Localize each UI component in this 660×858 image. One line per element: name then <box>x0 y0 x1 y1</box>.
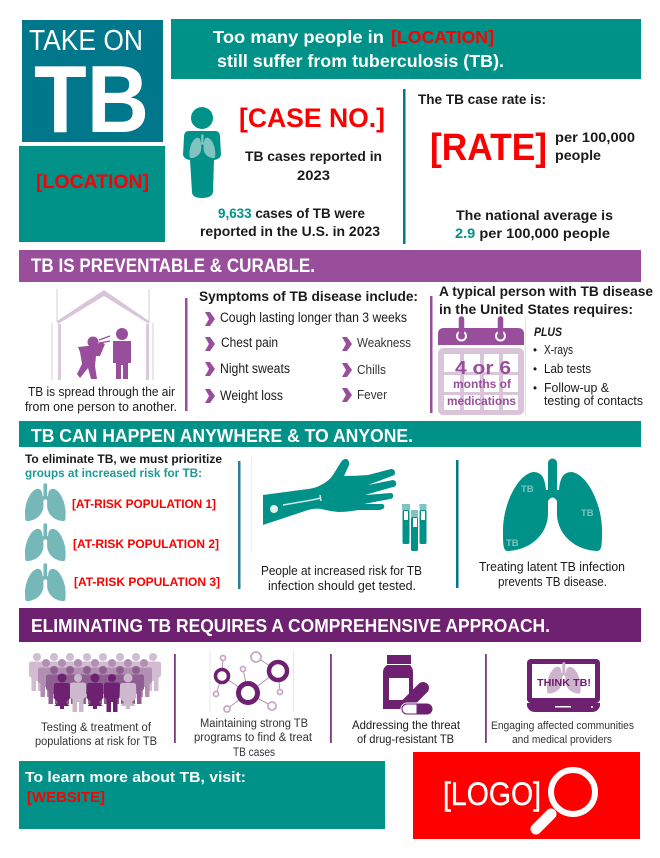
symptoms list <box>199 288 418 403</box>
stat: case rate: people <box>555 148 602 163</box>
stat: case rate: per 100,000 <box>555 130 635 145</box>
text: spread through air: from one person to another. <box>25 400 177 414</box>
national average text <box>455 208 613 241</box>
heading: preventable and curable <box>19 250 641 282</box>
symptoms list: Symptoms of TB disease include: <box>199 288 418 304</box>
text: get tested: People at increased risk for TB <box>261 564 422 578</box>
location box: [LOCATION] <box>36 172 149 193</box>
footer: logo box with magnifier: [LOGO] <box>443 776 541 812</box>
national cases text <box>200 206 381 239</box>
text: strong TB programs: Maintaining strong TB <box>200 718 308 730</box>
stat: case rate: [RATE] <box>430 127 547 169</box>
text: strong TB programs <box>194 718 313 759</box>
text: get tested: infection should get tested. <box>268 579 416 593</box>
symptoms list: Chills <box>357 362 386 377</box>
national cases text: reported in the U.S. in 2023 <box>200 224 381 239</box>
text: drug resistant <box>352 718 461 746</box>
icon: lungs with TB: TB <box>521 484 534 495</box>
heading: anywhere and anyone: TB CAN HAPPEN ANYWHERE & TO ANYONE. <box>31 426 413 446</box>
plus list: Lab tests <box>544 362 591 376</box>
icon: calendar: 4 or 6 <box>455 358 511 378</box>
symptoms list: Weight loss <box>220 388 283 403</box>
top banner <box>171 19 641 79</box>
national cases text: 9,633 cases of TB were <box>218 206 365 221</box>
footer: website box: [WEBSITE] <box>27 789 105 806</box>
plus list: PLUS <box>534 325 562 339</box>
text: latent TB: Treating latent TB infection <box>479 560 625 574</box>
icon: calendar: medications <box>447 396 516 408</box>
text: prioritize groups <box>25 452 222 480</box>
stat: case number: TB cases reported in <box>245 149 382 164</box>
icon: person with lungs <box>183 107 221 198</box>
text: prioritize groups: groups at increased risk for TB: <box>25 466 202 480</box>
stat: case rate <box>418 92 635 169</box>
text: testing and treatment: Testing & treatment of <box>41 722 152 734</box>
text: engaging communities: Engaging affected communities <box>491 720 634 732</box>
icon: laptop Think TB: THINK TB! <box>537 677 591 689</box>
text: latent TB <box>479 560 625 589</box>
icon: lungs with TB <box>503 459 602 551</box>
text: testing and treatment <box>35 722 157 748</box>
icon: connected program rings <box>210 650 294 712</box>
text: engaging communities: and medical providers <box>512 734 612 746</box>
plus list: • <box>533 345 537 357</box>
stat: case number <box>239 103 385 183</box>
title block: Take on TB: TAKE ON <box>29 25 143 57</box>
stat: case number: 2023 <box>297 168 331 183</box>
footer: website box <box>19 761 385 829</box>
at-risk population 2 <box>25 523 219 561</box>
icon: lungs with TB: TB <box>581 508 594 519</box>
plus list: testing of contacts <box>544 394 643 408</box>
icon: group of people <box>29 653 161 712</box>
icon: lungs with TB: TB <box>506 538 519 549</box>
heading: anywhere and anyone <box>19 421 641 447</box>
symptoms list: Chest pain <box>221 335 278 350</box>
icon: calendar <box>438 319 524 415</box>
icon: house with coughing person <box>52 289 153 380</box>
footer: website box: To learn more about TB, visit: <box>25 769 246 786</box>
symptoms list: Fever <box>357 387 388 402</box>
at-risk population 3 <box>25 563 220 601</box>
text: spread through air: TB is spread through the air <box>28 385 175 399</box>
plus list <box>533 325 643 408</box>
heading: comprehensive approach <box>19 608 641 642</box>
stat: case rate: The TB case rate is: <box>418 92 546 107</box>
top banner: Too many people in <box>213 27 384 47</box>
plus list: • <box>533 364 537 376</box>
text: strong TB programs: TB cases <box>233 747 275 759</box>
stat: case number: [CASE NO.] <box>239 103 385 133</box>
icon: calendar: months of <box>453 379 511 391</box>
text: latent TB: prevents TB disease. <box>498 575 607 589</box>
symptoms list: Cough lasting longer than 3 weeks <box>220 310 407 325</box>
text: drug resistant: of drug-resistant TB <box>357 732 454 746</box>
text: drug resistant: Addressing the threat <box>352 718 461 732</box>
treatment heading <box>439 283 653 317</box>
plus list: Follow-up & <box>544 381 610 395</box>
heading: preventable and curable: TB IS PREVENTABLE & CURABLE. <box>31 256 315 277</box>
plus list: X-rays <box>544 343 573 357</box>
treatment heading: A typical person with TB disease <box>439 283 653 299</box>
title block: Take on TB: TB <box>34 46 149 153</box>
symptoms list: Weakness <box>357 335 411 350</box>
footer: logo box with magnifier <box>413 752 640 839</box>
location box <box>19 146 165 242</box>
national average text: The national average is <box>456 208 613 223</box>
heading: comprehensive approach: ELIMINATING TB REQUIRES A COMPREHENSIVE APPROACH. <box>31 616 550 636</box>
top banner: [LOCATION] <box>391 27 494 47</box>
text: prioritize groups: To eliminate TB, we must prioritize <box>25 452 222 466</box>
text: engaging communities <box>491 720 634 746</box>
icon: laptop Think TB <box>527 659 600 712</box>
treatment heading: in the United States requires: <box>439 301 633 317</box>
at-risk population 3: [AT-RISK POPULATION 3] <box>74 575 220 589</box>
text: get tested <box>261 564 422 593</box>
text: testing and treatment: populations at risk for TB <box>35 736 157 748</box>
national average text: 2.9 per 100,000 people <box>455 226 611 241</box>
symptoms list: Night sweats <box>220 361 290 376</box>
icon: arm with syringe and test tubes <box>252 456 426 552</box>
at-risk population 1: [AT-RISK POPULATION 1] <box>72 497 216 511</box>
plus list: • <box>533 383 537 395</box>
top banner: still suffer from tuberculosis (TB). <box>217 51 504 71</box>
icon: medication bottle and pills <box>383 655 433 715</box>
text: spread through air <box>25 385 177 414</box>
at-risk population 1 <box>25 483 216 521</box>
at-risk population 2: [AT-RISK POPULATION 2] <box>73 537 219 551</box>
text: strong TB programs: programs to find & treat <box>194 732 313 744</box>
